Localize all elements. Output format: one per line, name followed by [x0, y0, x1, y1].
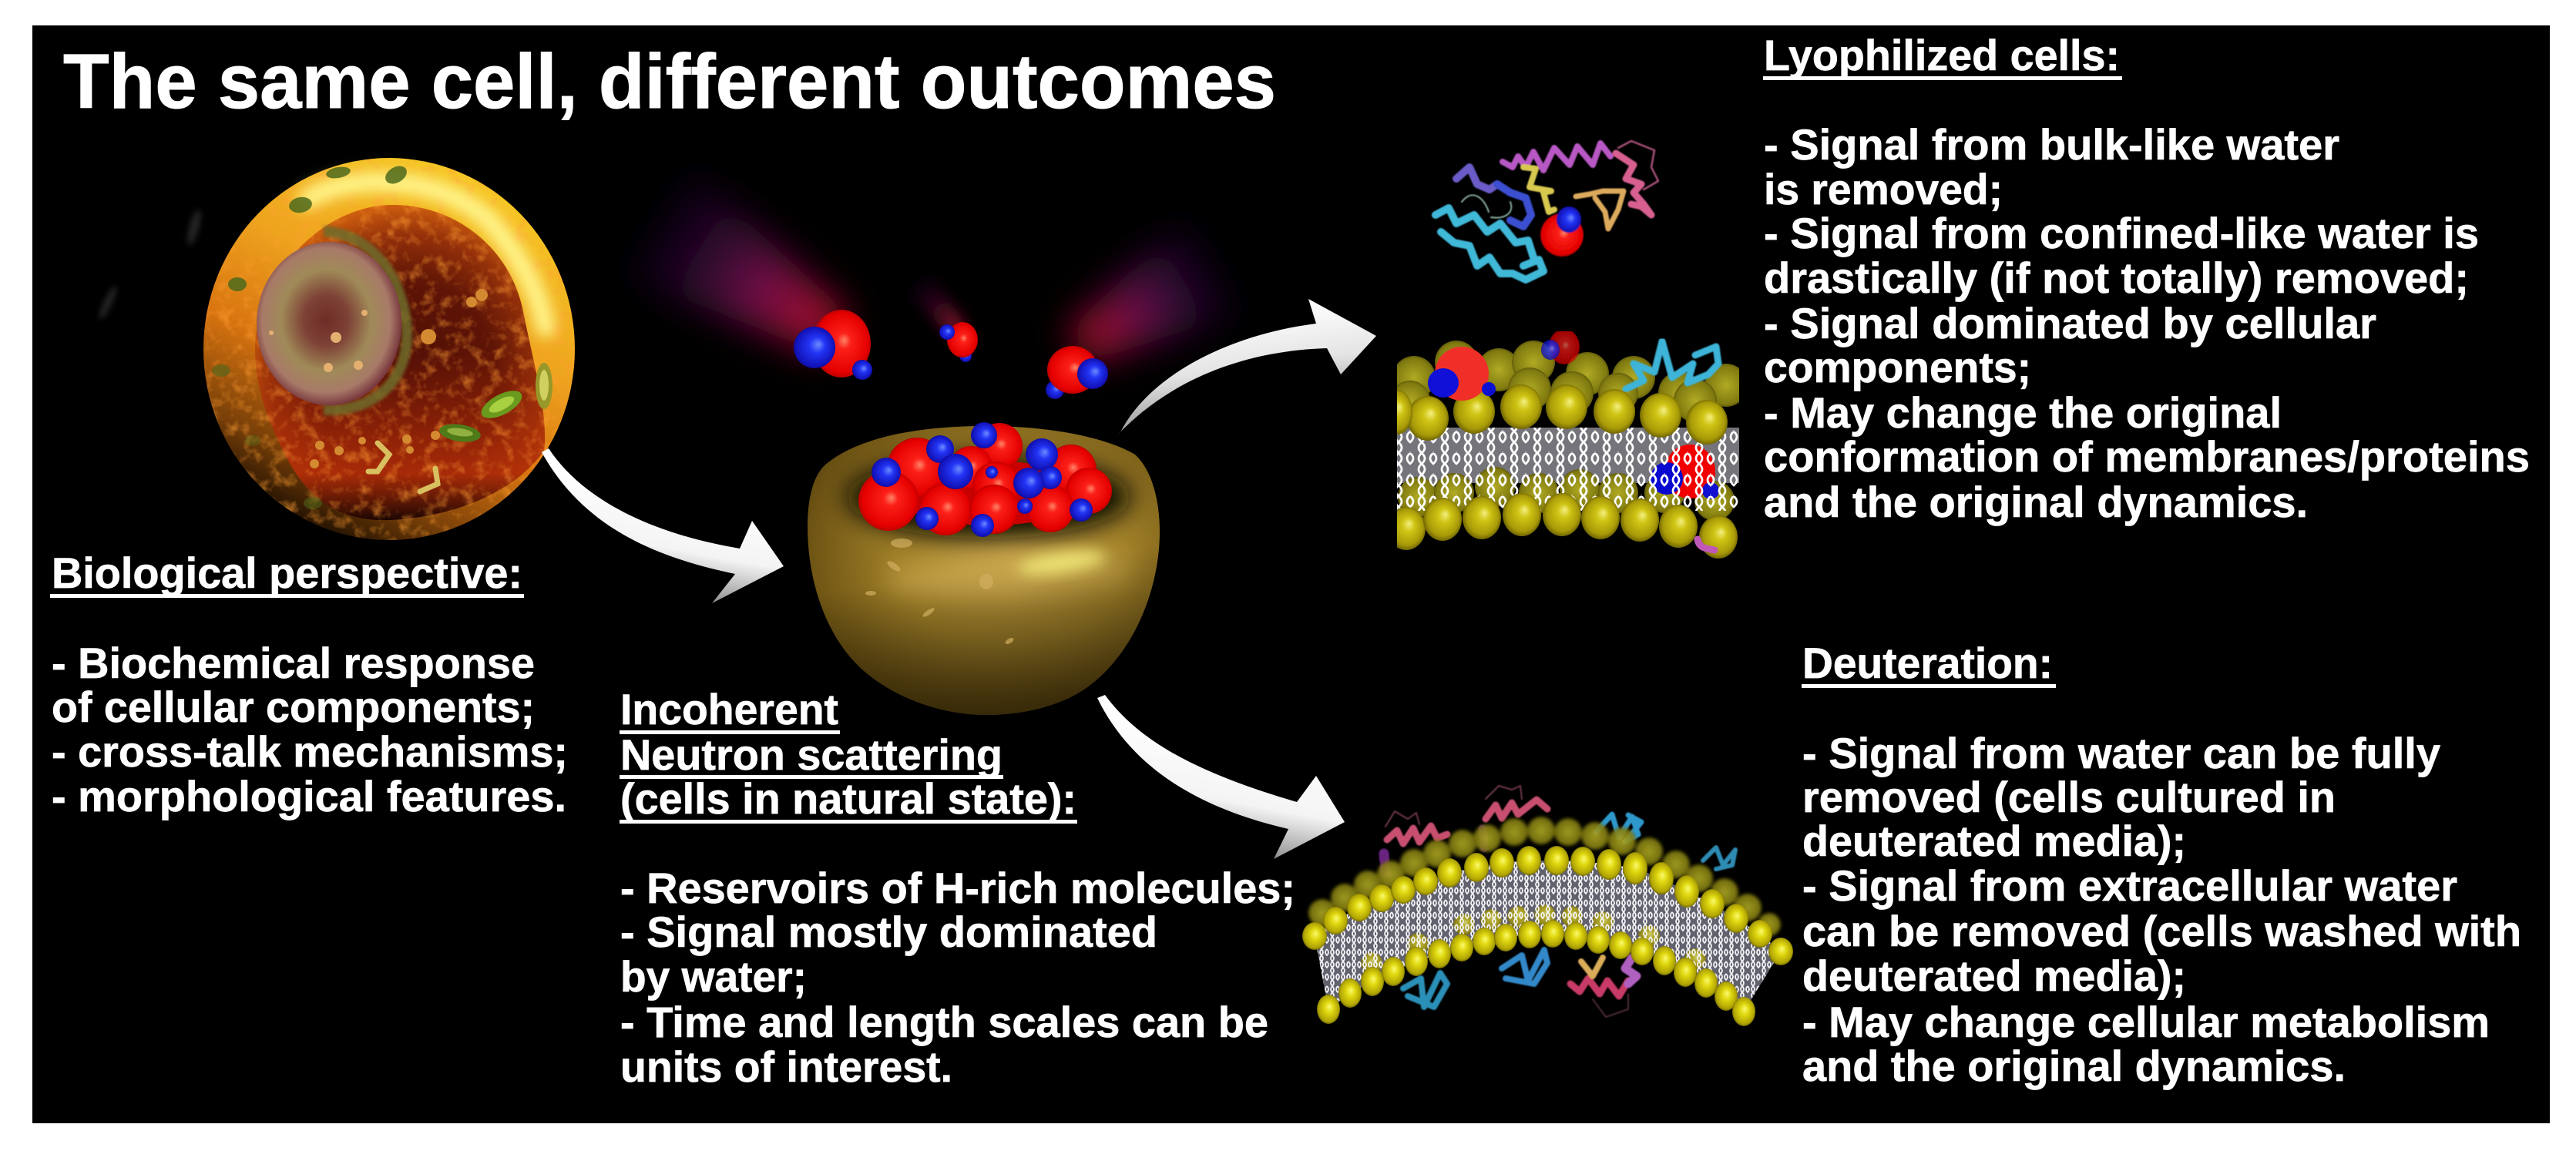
water on top of membrane [1428, 347, 1496, 401]
bullet lines: - Biochemical response [52, 639, 535, 687]
bullet lines: - morphological features. [52, 772, 566, 820]
flat lipid bilayer [1382, 329, 1748, 559]
bullet lines: - Signal mostly dominated [620, 908, 1157, 956]
top lipid heads [1382, 384, 1728, 445]
trail 2 [905, 271, 966, 337]
bullet lines: - Signal dominated by cellular [1764, 299, 2376, 347]
pink loop [1616, 153, 1651, 215]
bullet lines: - Signal from extracellular water [1802, 861, 2457, 910]
heading: Deuteration: [1802, 639, 2053, 687]
bullet lines: - cross-talk mechanisms; [52, 727, 568, 776]
bullet lines: conformation of membranes/proteins [1764, 432, 2530, 481]
magenta protein fragment [1698, 539, 1715, 550]
bound water molecule [1540, 206, 1584, 257]
arrow: cell to water reservoir [542, 448, 784, 603]
purple helix [1503, 143, 1610, 170]
cup water molecules [858, 422, 1112, 537]
water reservoir cup [808, 422, 1160, 715]
back lipid heads [1308, 817, 1781, 936]
blue protein lower [1502, 950, 1547, 984]
heading [620, 685, 1077, 824]
title: The same cell, different outcomes [63, 39, 1276, 125]
bullet lines: and the original dynamics. [1764, 478, 2308, 526]
cyan protein top [1596, 814, 1641, 842]
heading: Biological perspective: [52, 549, 522, 597]
gold loop [1576, 191, 1624, 229]
lower back lipid heads [1361, 904, 1706, 974]
bullet lines: is removed; [1764, 165, 2003, 213]
yellow segment [1523, 167, 1554, 212]
heading: (cells in natural state): [620, 774, 1076, 823]
bullet lines: - Signal from water can be fully [1802, 729, 2440, 777]
bullet lines: components; [1764, 343, 2031, 391]
bottom lipid heads [1317, 920, 1755, 1026]
cyan protein on membrane [1626, 341, 1718, 389]
heading: Incoherent [620, 685, 838, 733]
lipid tails [1315, 861, 1781, 1012]
text block: biological perspective [50, 549, 568, 820]
curved lipid bilayer [1302, 786, 1793, 1026]
molecule 3 [1046, 346, 1108, 399]
lower proteins [1403, 950, 1637, 1017]
bullet lines: drastically (if not totally) removed; [1764, 253, 2469, 302]
cell interior [255, 205, 545, 520]
small water on membrane [1541, 329, 1580, 364]
bullet lines: - Reservoirs of H-rich molecules; [620, 864, 1295, 912]
cup highlight [1016, 546, 1107, 579]
bullet lines [52, 639, 568, 820]
bullet lines: and the original dynamics. [1802, 1042, 2346, 1090]
thin pink loop [1618, 141, 1658, 190]
organelles [438, 363, 552, 445]
bullet lines: - Time and length scales can be [620, 998, 1268, 1046]
surface patches [212, 163, 410, 509]
bullet lines: units of interest. [620, 1042, 952, 1091]
pink helix top [1483, 786, 1547, 847]
heading: Neutron scattering [620, 730, 1003, 779]
top lipid heads [1302, 846, 1793, 965]
molecule 2 [939, 322, 978, 362]
bullet lines [1802, 729, 2521, 1090]
tail backing [1315, 861, 1781, 1012]
bullet lines [620, 864, 1295, 1091]
bullet lines: - Signal from confined-like water is [1764, 209, 2479, 257]
cup broad glow [885, 548, 1134, 600]
bullet lines: removed (cells cultured in [1802, 773, 2336, 821]
tail backing [1397, 428, 1739, 483]
lower back lipid heads [1398, 467, 1735, 521]
water molecules with trails [628, 172, 1239, 399]
membrane lipid tails [1397, 428, 1739, 511]
bullet lines [1764, 120, 2530, 526]
cell outer rim [203, 158, 575, 540]
bullet lines: can be removed (cells washed with [1802, 907, 2521, 955]
arrow: reservoir to lyophilized cells [1117, 299, 1376, 436]
bullet lines: - May change cellular metabolism [1802, 998, 2490, 1046]
cup lower shading [808, 426, 1160, 715]
bullet lines: of cellular components; [52, 683, 535, 731]
pink helix lower [1570, 958, 1637, 1017]
back lipid heads [1390, 341, 1748, 422]
text block: deuteration [1802, 639, 2521, 1090]
rim highlight [308, 182, 546, 327]
water inside membrane [1651, 445, 1719, 499]
bullet lines: deuterated media); [1802, 951, 2186, 1000]
bullet lines: by water; [620, 952, 807, 1001]
bullet lines: deuterated media); [1802, 817, 2186, 865]
text block: lyophilized cells [1763, 31, 2530, 526]
trail 1 [628, 172, 848, 354]
text block: incoherent neutron scattering [620, 685, 1295, 1091]
violet-blue helix [1456, 167, 1531, 227]
cup speckles [865, 539, 1015, 646]
nucleoli [269, 310, 368, 372]
nuclear envelope [324, 231, 407, 410]
illustration: cell cross-section [203, 158, 575, 540]
protein with bound water [1436, 141, 1658, 280]
vesicles [310, 289, 488, 468]
molecule 1 [794, 310, 872, 380]
bullet lines: - May change the original [1764, 388, 2282, 437]
trail 3 [1069, 221, 1239, 362]
cyan protein right [1703, 847, 1735, 869]
cup interior [846, 455, 1131, 539]
faint streaks beside cell [96, 208, 203, 321]
cup body [808, 426, 1160, 715]
cyan protein lower left [1403, 973, 1447, 1007]
upper proteins [1384, 786, 1735, 874]
thin dark loop [1462, 195, 1511, 218]
nucleus [257, 242, 401, 405]
pink helix left [1384, 811, 1447, 874]
heading: Lyophilized cells: [1764, 31, 2120, 79]
arrow: reservoir to deuteration [1097, 695, 1345, 859]
granules [368, 443, 438, 492]
cyan helices [1436, 208, 1543, 280]
bullet lines: - Signal from bulk-like water [1764, 120, 2339, 169]
bottom lipid heads [1387, 493, 1738, 559]
